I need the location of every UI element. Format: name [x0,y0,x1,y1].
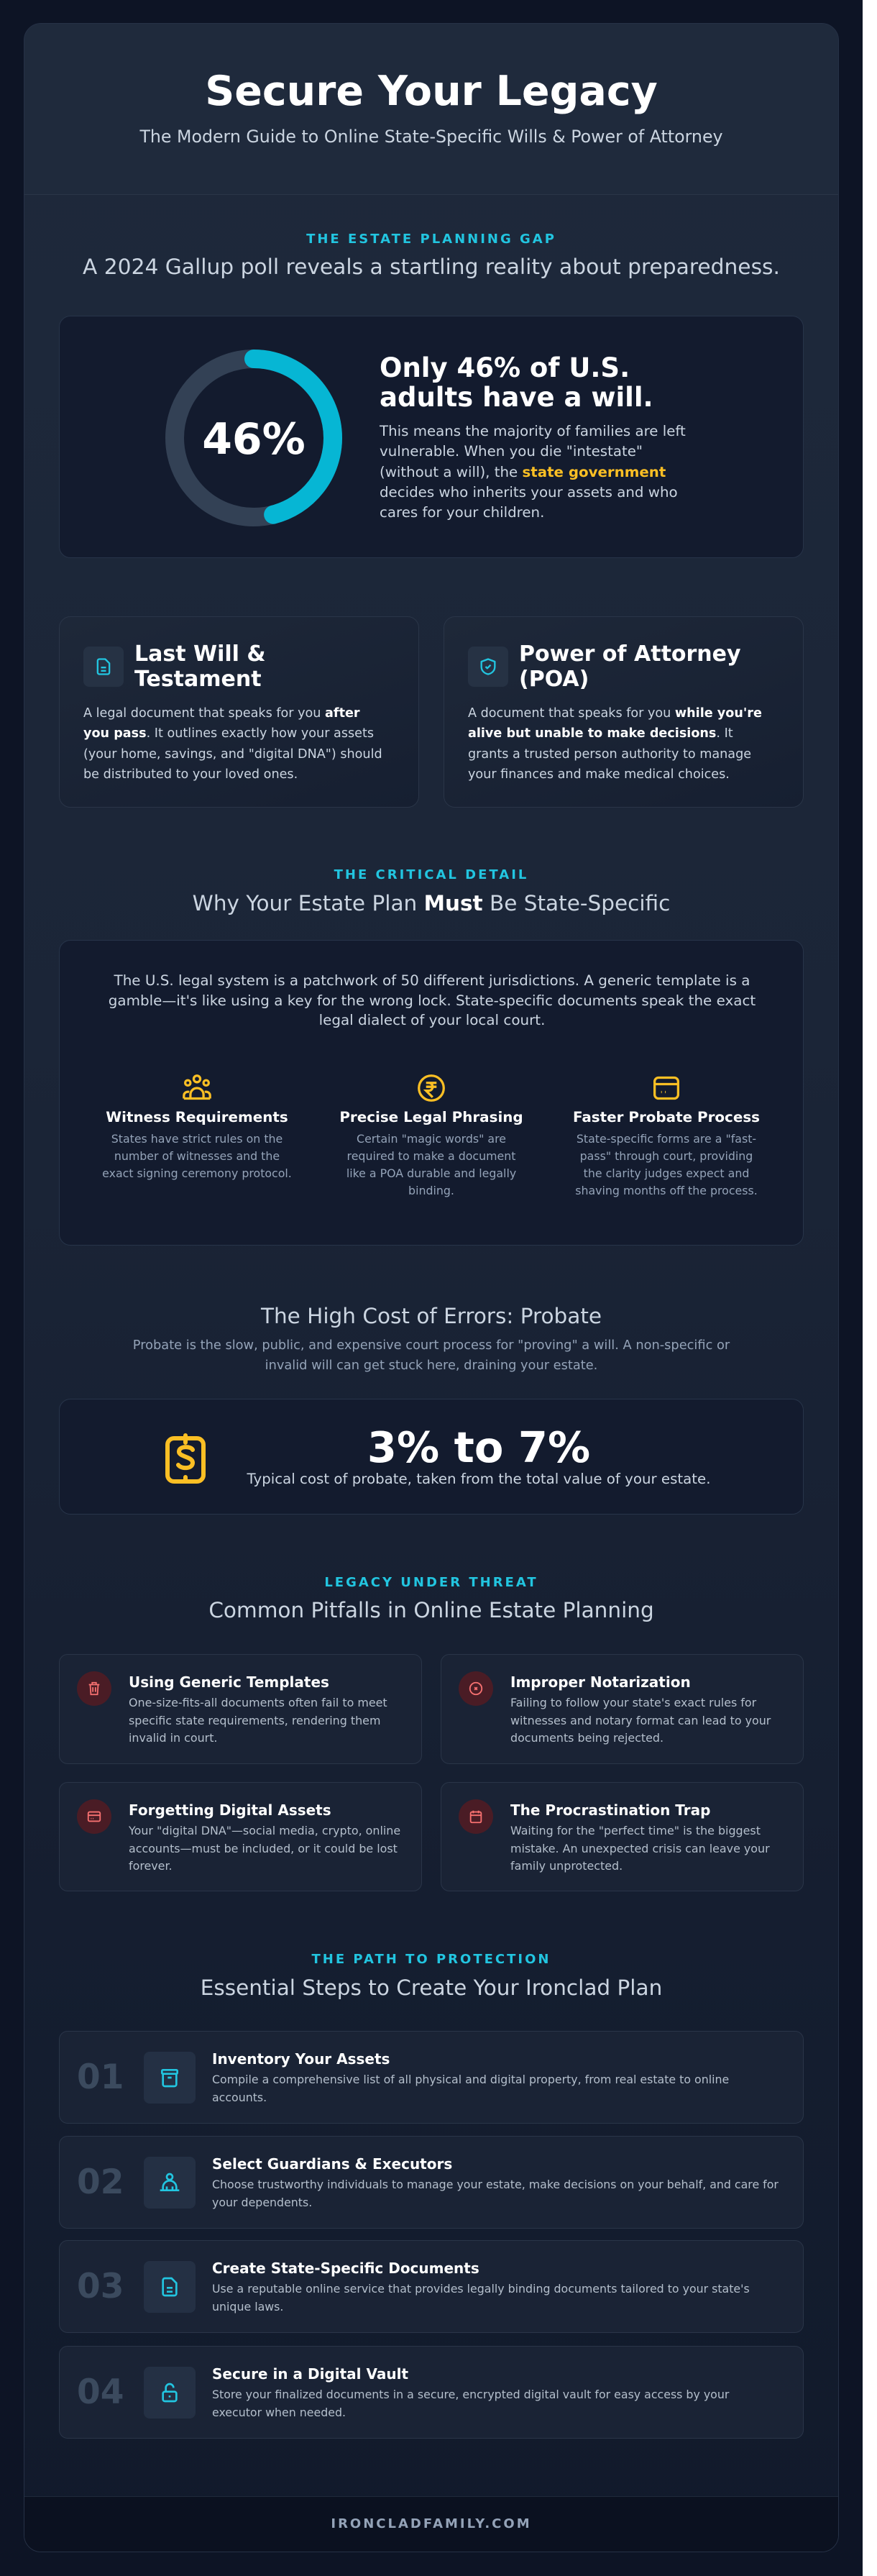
kicker: path to protection: THE PATH TO PROTECTION [312,1952,551,1967]
heading: Last Will & [134,641,266,667]
icon: coin [418,1074,445,1102]
heading [519,641,741,692]
pitfall: notarization: documents being rejected. [510,1731,664,1745]
pitfall: notarization: witnesses and notary format can lead to your [510,1713,771,1727]
column: probate: pass" through court, providing [580,1149,753,1163]
icon: archive [144,2052,196,2104]
donut chart: 46% [202,414,306,465]
heading: gallup poll: A 2024 Gallup poll reveals a startling reality about preparedness. [83,255,780,280]
step 01: Inventory Your Assets [212,2050,390,2068]
column: phrasing: required to make a document [347,1149,515,1163]
step 02: your dependents. [212,2195,312,2209]
column: probate: shaving months off the process. [575,1184,758,1197]
stat heading: adults have a will. [380,382,653,413]
pitfall: digital assets: Your "digital DNA"—social media, crypto, online [129,1824,400,1837]
pitfall: generic templates: Using Generic Templates [129,1673,329,1691]
heading: probate: The High Cost of Errors: Probate [261,1304,602,1328]
stat paragraph: cares for your children. [380,504,544,521]
stat paragraph: decides who inherits your assets and who [380,484,678,501]
step 02: 02 [77,2162,124,2202]
pitfall: procrastination: The Procrastination Trap [510,1801,710,1819]
kicker: estate planning gap: THE ESTATE PLANNING GAP [306,232,556,247]
stat paragraph: vulnerable. When you die "intestate" [380,443,643,460]
pitfall: digital assets: Forgetting Digital Assets [129,1801,331,1819]
text: be distributed to your loved ones. [83,767,298,782]
step 02: Choose trustworthy individuals to manage your estate, make decisions on your behalf, and care for [212,2178,779,2191]
text: grants a trusted person authority to manage [468,747,751,762]
pitfall: generic templates: specific state requirements, rendering them [129,1713,380,1727]
text: you pass. It outlines exactly how your assets [83,726,374,741]
pitfall: generic templates: invalid in court. [129,1731,217,1745]
step 01: Compile a comprehensive list of all physical and digital property, from real estate to online [212,2073,729,2086]
column: probate: State-specific forms are a "fast- [577,1132,756,1146]
heading: Testament [134,667,262,692]
stat paragraph: (without a will), the state government [380,464,666,480]
stat heading [380,352,653,413]
pitfall: generic templates [59,1654,422,1764]
column: phrasing [339,1074,523,1197]
text: alive but unable to make decisions. It [468,726,733,741]
probate text: invalid will can get stuck here, draining your estate. [265,1358,597,1373]
pitfall: notarization: Failing to follow your state's exact rules for [510,1696,756,1709]
donut chart [165,350,342,526]
stat paragraph [380,423,686,521]
subtitle: The Modern Guide to Online State-Specific Wills & Power of Attorney [139,127,723,147]
heading: state specific: Why Your Estate Plan Must Be State-Specific [193,891,670,915]
step 03 [59,2240,804,2333]
heading: steps: Essential Steps to Create Your Ironclad Plan [201,1976,662,2000]
step 03: Use a reputable online service that provides legally binding documents tailored to your state's [212,2282,750,2296]
pitfall: procrastination [441,1782,804,1891]
column: phrasing: Precise Legal Phrasing [339,1109,523,1125]
intro text [109,972,756,1028]
icon: x circle [459,1671,493,1706]
pitfall: notarization: Improper Notarization [510,1673,691,1691]
text [468,706,762,782]
heading: pitfalls: Common Pitfalls in Online Estate Planning [208,1598,654,1622]
step 01 [59,2031,804,2124]
step 04: executor when needed. [212,2405,346,2419]
pitfall: generic templates: One-size-fits-all documents often fail to meet [129,1696,387,1709]
panel: last will [59,616,419,808]
heading: Power of Attorney [519,641,741,667]
step 04: Secure in a Digital Vault [212,2365,408,2383]
column: probate: Faster Probate Process [573,1109,760,1125]
footer: IRONCLADFAMILY.COM [331,2516,532,2531]
stat paragraph: This means the majority of families are left [380,423,686,439]
text: A legal document that speaks for you after [83,706,360,721]
step 03: 03 [77,2267,124,2306]
column: phrasing: binding. [408,1184,454,1197]
step 02 [59,2136,804,2229]
pitfall: procrastination: mistake. An unexpected crisis can leave your [510,1841,770,1855]
intro text: gamble—it's like using a key for the wrong lock. State-specific documents speak the exact [109,992,756,1009]
kicker: critical detail: THE CRITICAL DETAIL [334,867,528,882]
step 01: 01 [77,2057,124,2097]
pitfall: procrastination: Waiting for the "perfect time" is the biggest [510,1824,761,1837]
pitfall: digital assets: forever. [129,1859,173,1873]
panel: stat 46% [59,316,804,558]
text [83,706,382,782]
intro text: The U.S. legal system is a patchwork of 50 different jurisdictions. A generic template is a [114,972,750,989]
icon: dollar [165,1433,206,1484]
column: phrasing: like a POA durable and legally [346,1166,516,1180]
column: probate: the clarity judges expect and [584,1166,749,1180]
column: probate [573,1076,760,1197]
title: Secure Your Legacy [205,68,658,115]
column: witness: exact signing ceremony protocol. [102,1166,292,1180]
text: (your home, savings, and "digital DNA") should [83,747,382,762]
intro text: legal dialect of your local court. [319,1012,545,1028]
step 02: Select Guardians & Executors [212,2155,452,2173]
panel: probate cost [59,1399,804,1515]
probate text: Probate is the slow, public, and expensive court process for "proving" a will. A non-specific or [133,1338,730,1353]
step 04: Store your finalized documents in a secure, encrypted digital vault for easy access by your [212,2388,729,2401]
pitfall: digital assets [59,1782,422,1891]
icon: shield [468,647,508,687]
icon: document [83,647,124,687]
kicker: legacy under threat: LEGACY UNDER THREAT [324,1575,538,1590]
icon: card [77,1799,111,1834]
icon: card [653,1076,679,1100]
icon: lock [144,2367,196,2419]
column: witness [102,1074,292,1180]
step 04: 04 [77,2372,124,2412]
panel: power of attorney [444,616,804,808]
pitfall: notarization [441,1654,804,1764]
step 03: unique laws. [212,2300,283,2313]
heading: (POA) [519,667,589,692]
text: A document that speaks for you while you're [468,706,762,721]
column: witness: Witness Requirements [106,1109,288,1125]
icon: document [144,2261,196,2313]
icon: trash [77,1671,111,1706]
stat heading: Only 46% of U.S. [380,352,630,383]
text: your finances and make medical choices. [468,767,730,782]
step 03: Create State-Specific Documents [212,2260,479,2277]
step 01: accounts. [212,2090,267,2104]
pitfall: digital assets: accounts—must be included, or it could be lost [129,1841,398,1855]
column: phrasing: Certain "magic words" are [357,1132,506,1146]
panel: state specific [59,940,804,1246]
icon: people [183,1074,211,1100]
big stat: 3% to 7% [367,1422,590,1472]
heading [134,641,266,692]
column: witness: States have strict rules on the [111,1132,283,1146]
icon: calendar [459,1799,493,1834]
probate text [133,1338,730,1373]
column: witness: number of witnesses and the [114,1149,280,1163]
caption: Typical cost of probate, taken from the total value of your estate. [247,1471,710,1487]
icon: person [144,2157,196,2209]
step 04 [59,2346,804,2439]
pitfall: procrastination: family unprotected. [510,1859,623,1873]
